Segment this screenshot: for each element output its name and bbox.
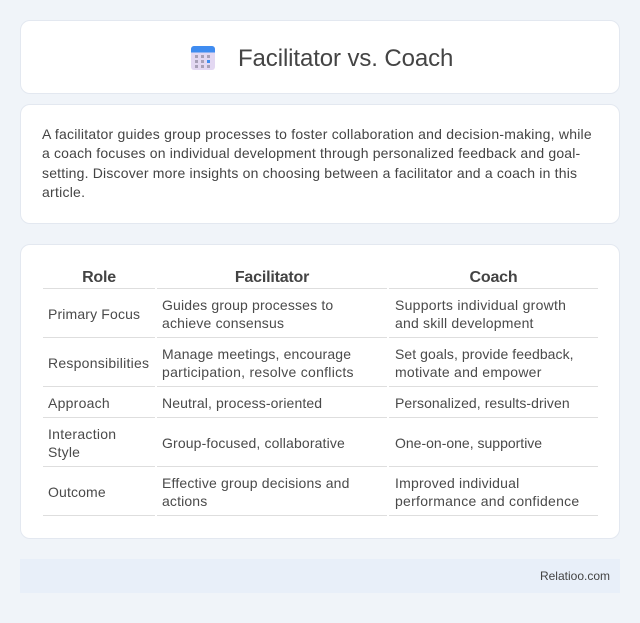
table panel — [20, 244, 620, 539]
table header: Facilitator — [235, 269, 309, 286]
intro panel — [20, 104, 620, 224]
row: primary focus: Guides group processes to — [162, 297, 333, 313]
row: outcome: performance and confidence — [395, 493, 579, 509]
intro text: A facilitator guides group processes to foster collaboration and decision-making, while — [42, 126, 592, 142]
row: responsibilities: motivate and empower — [395, 364, 542, 380]
row: responsibilities: Responsibilities — [48, 355, 149, 371]
row: responsibilities: Set goals, provide feedback, — [395, 346, 574, 362]
row: primary focus — [48, 297, 566, 331]
row: primary focus: Supports individual growth — [395, 297, 566, 313]
row: interaction style: Interaction — [48, 426, 116, 442]
header panel — [20, 20, 620, 94]
row: primary focus: Primary Focus — [48, 306, 140, 322]
row: responsibilities: Manage meetings, encourage — [162, 346, 351, 362]
row: outcome: Effective group decisions and — [162, 475, 350, 491]
row: interaction style: One-on-one, supportive — [395, 435, 542, 451]
title: Facilitator vs. Coach — [238, 45, 453, 72]
footer text: Relatioo.com — [540, 569, 610, 583]
row: outcome: actions — [162, 493, 207, 509]
row: interaction style: Group-focused, collaborative — [162, 435, 345, 451]
row: approach: Personalized, results-driven — [395, 395, 570, 411]
intro text: a coach focuses on individual development through personalized feedback and goal- — [42, 145, 580, 161]
row: outcome — [48, 475, 579, 509]
row: primary focus: achieve consensus — [162, 315, 284, 331]
row: approach: Approach — [48, 395, 110, 411]
row: outcome: Improved individual — [395, 475, 519, 491]
row: approach — [48, 395, 570, 411]
intro text: article. — [42, 184, 85, 200]
footer bar — [20, 559, 620, 593]
intro text: setting. Discover more insights on choosing between a facilitator and a coach in this — [42, 165, 577, 181]
row: outcome: Outcome — [48, 484, 106, 500]
table header: Coach — [470, 269, 517, 286]
table header — [82, 269, 517, 286]
row: responsibilities — [48, 346, 574, 380]
row: interaction style: Style — [48, 444, 80, 460]
intro text — [42, 126, 592, 200]
row: responsibilities: participation, resolve conflicts — [162, 364, 354, 380]
table header: Role — [82, 269, 116, 286]
row: approach: Neutral, process-oriented — [162, 395, 322, 411]
row: primary focus: and skill development — [395, 315, 534, 331]
icon: calendar — [191, 46, 215, 70]
row: interaction style — [48, 426, 542, 460]
